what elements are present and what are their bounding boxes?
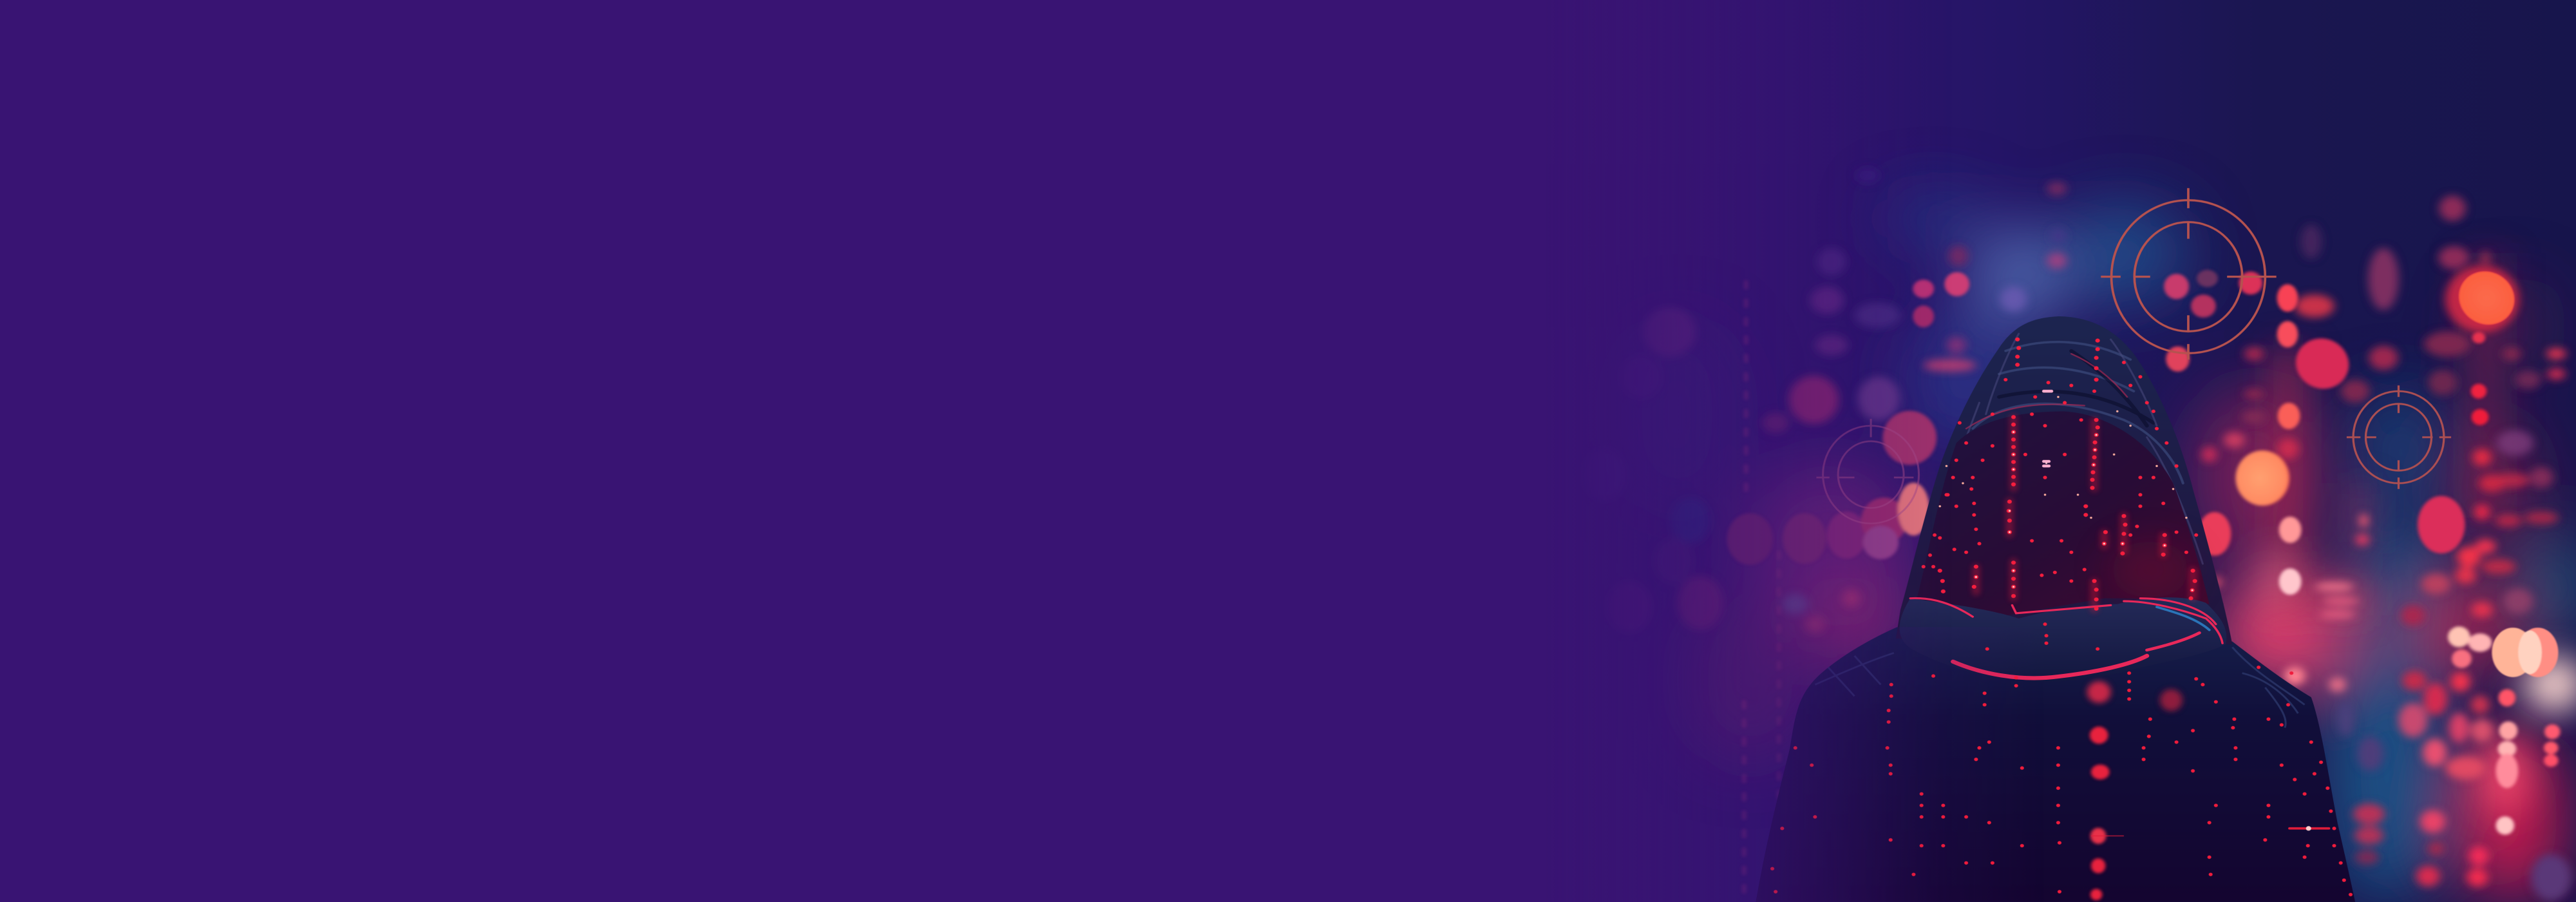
large atmospheric glows	[1618, 193, 2576, 902]
left edge fade into the solid purple panel	[1506, 0, 1966, 902]
target reticle: faint left	[1816, 419, 1919, 524]
LED glyph marks on hood	[2043, 391, 2052, 466]
target reticle: large	[2101, 188, 2277, 360]
shoulder quilting	[1815, 648, 2305, 728]
bokeh orbs: crisp red and orange lights	[1727, 270, 2560, 835]
hooded figure	[1756, 316, 2355, 902]
shadowy face glow	[2111, 541, 2190, 599]
cowl collar	[1900, 597, 2226, 682]
cowl neon veins	[1910, 598, 2222, 678]
large blurred orbs on coat spine	[2087, 681, 2329, 900]
faint dash columns at left	[1744, 282, 1779, 897]
blurred bokeh lights: right side	[2201, 196, 2571, 900]
LED bright centers	[1976, 391, 2192, 590]
LED dots on the collar and coat	[1772, 624, 2351, 894]
coat-side purple fade over the figure	[1756, 627, 2045, 902]
LED matrix dots on the hood	[1924, 340, 2196, 609]
soft vertical neon streaks	[2265, 253, 2576, 814]
face opening shadow	[1917, 411, 2210, 615]
target reticle: small right	[2347, 385, 2451, 489]
LED matrix glow layer	[1976, 417, 2193, 609]
hood shell	[1896, 316, 2232, 644]
double orange lamp lower right	[2492, 628, 2558, 677]
blurred bokeh lights: left side	[1584, 168, 2067, 633]
hood folds	[1933, 334, 2202, 564]
crisp bokeh orb: upper-right orange light	[2445, 265, 2523, 332]
coat body	[1756, 627, 2355, 902]
background gradient of the city scene	[1506, 0, 2576, 902]
